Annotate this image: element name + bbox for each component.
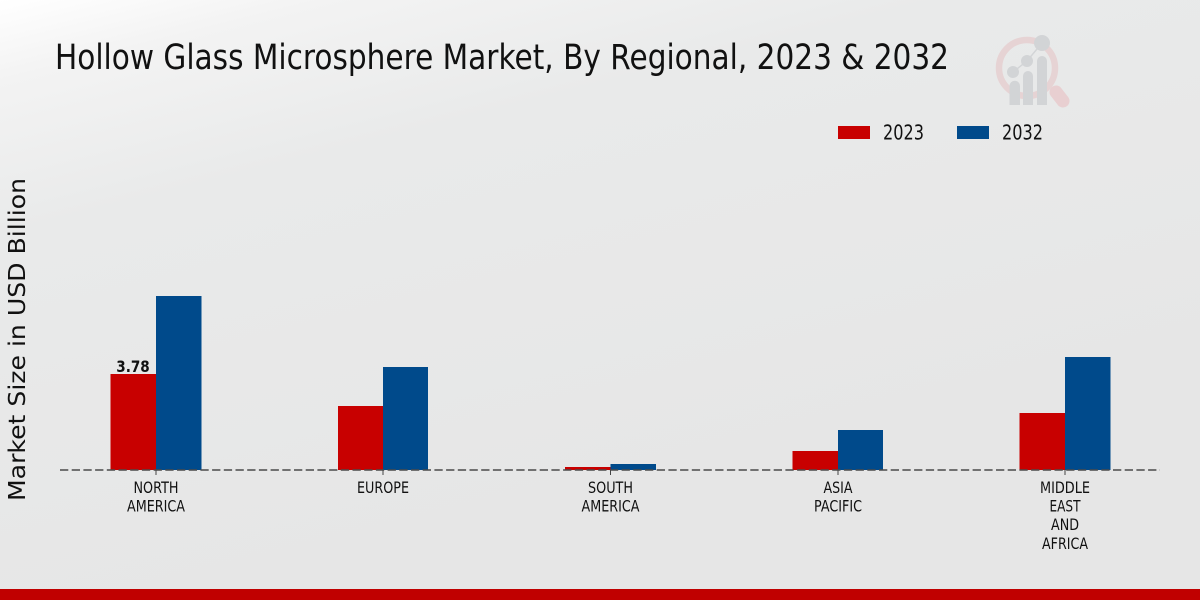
x label: Asia Pacific [814, 478, 862, 516]
x label: South America [582, 478, 640, 516]
legend [838, 120, 1043, 144]
x label: Middle East and Africa: AND [1051, 515, 1079, 534]
x axis baseline [60, 469, 1160, 471]
x label: Middle East and Africa: AFRICA [1042, 534, 1088, 553]
legend item: 2032 [957, 120, 1043, 144]
x label: South America: SOUTH [588, 478, 633, 497]
y axis title: Market Size in USD Billion [5, 178, 31, 501]
legend item: 2023: 2023 [883, 120, 924, 144]
footer bar [0, 589, 1200, 600]
x label: Europe: EUROPE [357, 478, 409, 497]
bars: Middle East and Africa [1020, 357, 1110, 470]
title: Hollow Glass Microsphere Market, By Regional, 2023 & 2032 [55, 38, 949, 78]
bar chart [60, 296, 1160, 475]
icon: magnifier logo watermark [999, 35, 1063, 105]
x label: Middle East and Africa: MIDDLE [1040, 478, 1090, 497]
x label: South America: AMERICA [582, 496, 640, 516]
x label: Middle East and Africa: EAST [1050, 496, 1081, 516]
x label: North America: NORTH [134, 478, 178, 497]
x label: Asia Pacific: PACIFIC [814, 496, 862, 516]
x label: Middle East and Africa [1040, 478, 1090, 553]
data label: 3.78: 3.78 [116, 357, 150, 376]
x label: North America: AMERICA [127, 496, 185, 516]
bars: North America [110, 296, 202, 470]
bars: South America [565, 464, 656, 470]
x label: Asia Pacific: ASIA [824, 478, 853, 497]
legend item: 2023 [838, 120, 924, 144]
x label: North America [127, 478, 185, 516]
bars: Europe [338, 367, 428, 470]
bars: Asia Pacific [792, 430, 883, 470]
legend item: 2032: 2032 [1002, 120, 1043, 144]
